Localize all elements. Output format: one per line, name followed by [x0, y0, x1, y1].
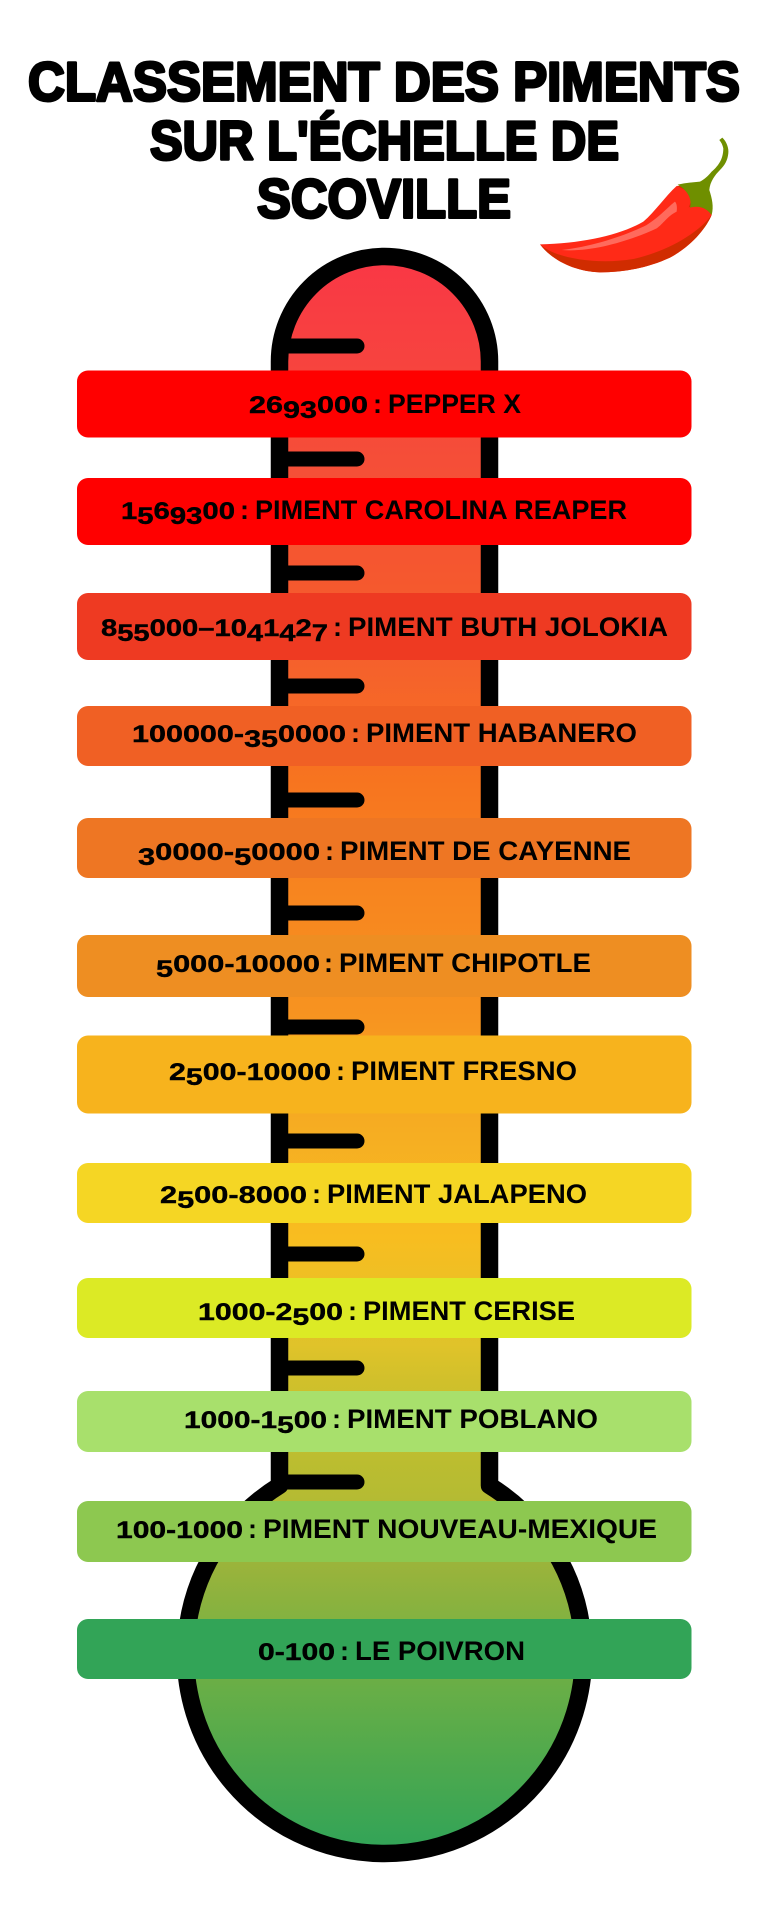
band: Cerise: 1000-2500: [198, 1299, 343, 1331]
band: Fresno: PIMENT FRESNO: [351, 1056, 577, 1086]
band: Fresno: 2500-10000: [169, 1059, 331, 1091]
band: Chipotle: 5000-10000: [156, 951, 320, 983]
band: Poivron: 0-100: [258, 1639, 335, 1666]
band: Buth Jolokia: PIMENT BUTH JOLOKIA: [348, 612, 668, 642]
band: Cerise: PIMENT CERISE: [363, 1296, 575, 1326]
band: Cerise: :: [348, 1296, 357, 1326]
band: Poivron: [77, 1619, 692, 1679]
band: Poblano: :: [332, 1404, 341, 1434]
band: Nouveau-Mexique: PIMENT NOUVEAU-MEXIQUE: [263, 1514, 657, 1544]
icon: red chili pepper: [540, 138, 728, 272]
band: Carolina Reaper: PIMENT CAROLINA REAPER: [255, 495, 627, 525]
band: Jalapeno: :: [312, 1179, 321, 1209]
band: Cayenne: PIMENT DE CAYENNE: [340, 836, 631, 866]
scale ticks: [284, 338, 365, 1490]
band: Jalapeno: 2500-8000: [160, 1182, 307, 1214]
band: Chipotle: PIMENT CHIPOTLE: [339, 948, 591, 978]
band: Habanero: :: [351, 718, 360, 748]
band: Fresno: :: [336, 1056, 345, 1086]
band: Pepper X: 2693000: [249, 392, 368, 424]
band: Poivron: LE POIVRON: [355, 1636, 525, 1666]
title: SCOVILLE: [257, 168, 511, 230]
band: Poivron: :: [340, 1636, 349, 1666]
band: Nouveau-Mexique: [77, 1501, 692, 1562]
band: Buth Jolokia: :: [333, 612, 342, 642]
band: Jalapeno: PIMENT JALAPENO: [327, 1179, 587, 1209]
band: Chipotle: [77, 935, 692, 997]
band: Cayenne: [77, 818, 692, 878]
band: Habanero: 100000-350000: [132, 721, 346, 753]
band: Poblano: [77, 1391, 692, 1452]
band: Carolina Reaper: :: [240, 495, 249, 525]
band: Poblano: PIMENT POBLANO: [347, 1404, 598, 1434]
band: Jalapeno: [77, 1163, 692, 1223]
band: Nouveau-Mexique: 100-1000: [116, 1517, 243, 1544]
band: Pepper X: [77, 370, 692, 438]
band: Habanero: [77, 706, 692, 766]
band: Carolina Reaper: 1569300: [121, 498, 235, 530]
band: Habanero: PIMENT HABANERO: [366, 718, 637, 748]
title: SUR L'ÉCHELLE DE: [150, 110, 619, 172]
band: Poblano: 1000-1500: [184, 1407, 327, 1439]
title: [28, 50, 740, 230]
band: Chipotle: :: [324, 948, 333, 978]
band: Buth Jolokia: [77, 593, 692, 660]
band: Cayenne: :: [325, 836, 334, 866]
band: Fresno: [77, 1036, 692, 1114]
thermometer outline and gradient fill: [185, 256, 583, 1854]
band: Buth Jolokia: 855000–1041427: [101, 615, 328, 647]
thermometer: [185, 256, 583, 1854]
band: Pepper X: PEPPER X: [388, 389, 521, 419]
band: Carolina Reaper: [77, 478, 692, 545]
band: Pepper X: :: [373, 389, 382, 419]
band: Cerise: [77, 1278, 692, 1338]
band: Cayenne: 30000-50000: [138, 839, 320, 871]
band: Nouveau-Mexique: :: [248, 1514, 257, 1544]
